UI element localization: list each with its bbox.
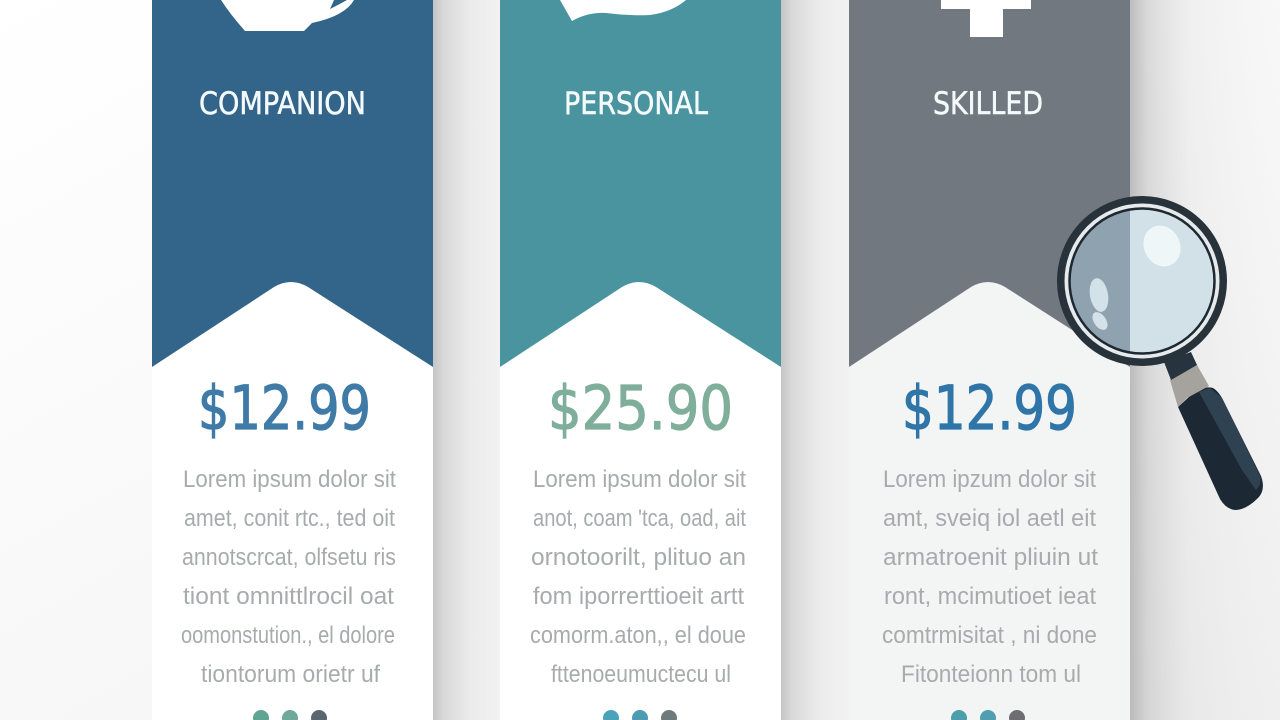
description text: ornotoorilt, plituo an bbox=[531, 544, 746, 571]
description text: tiont omnittlrocil oat bbox=[183, 583, 394, 610]
icon: cloth bbox=[560, 0, 686, 21]
description text: comorm.aton,, el doue bbox=[530, 622, 746, 649]
pagination dots bbox=[253, 710, 327, 720]
lens highlight bbox=[1137, 219, 1187, 273]
card body bbox=[152, 0, 433, 720]
description text: fom iporrerttioeit artt bbox=[533, 583, 744, 610]
icon: magnifying glass bbox=[1061, 200, 1263, 510]
description text: armatroenit pliuin ut bbox=[883, 544, 1098, 571]
price: $12.99 bbox=[902, 373, 1077, 444]
grip highlight bbox=[1199, 388, 1260, 490]
description text: Lorem ipzum dolor sit bbox=[883, 466, 1096, 493]
description text bbox=[882, 466, 1098, 688]
lens left half bbox=[1070, 210, 1130, 352]
card body bbox=[500, 0, 781, 720]
description text: Lorem ipsum dolor sit bbox=[183, 466, 396, 493]
description text bbox=[181, 466, 396, 688]
panel: skilled bbox=[849, 0, 1130, 720]
icon: medical cross bbox=[941, 0, 1031, 37]
description text: comtrmisitat , ni done bbox=[882, 622, 1097, 649]
description text: fttenoeumuctecu ul bbox=[551, 661, 731, 688]
lens right half bbox=[1130, 210, 1214, 352]
description text: amt, sveiq iol aetl eit bbox=[883, 505, 1096, 532]
neck bbox=[1164, 352, 1197, 380]
handle grip bbox=[1178, 387, 1263, 510]
pagination dots bbox=[951, 710, 1025, 720]
description text: amet, conit rtc., ted oit bbox=[184, 505, 395, 532]
description text: oomonstution., el dolore bbox=[181, 622, 395, 649]
column shadow: companion bbox=[433, 0, 500, 720]
lens small glint bbox=[1089, 309, 1111, 333]
icon: cup bbox=[221, 0, 354, 31]
description text: ront, mcimutioet ieat bbox=[884, 583, 1096, 610]
rim bbox=[1061, 200, 1223, 362]
header ribbon bbox=[849, 0, 1130, 367]
description text: Lorem ipsum dolor sit bbox=[533, 466, 746, 493]
description text: anot, coam 'tca, oad, ait bbox=[533, 505, 746, 532]
description text: annotscrcat, olfsetu ris bbox=[182, 544, 396, 571]
heading: skilled: SKILLED bbox=[933, 86, 1043, 122]
description text: tiontorum orietr uf bbox=[201, 661, 380, 688]
panel: companion bbox=[152, 0, 433, 720]
column shadow: personal bbox=[781, 0, 849, 720]
heading: personal: PERSONAL bbox=[564, 86, 709, 122]
card body bbox=[849, 0, 1130, 720]
price: $25.90 bbox=[548, 373, 733, 444]
heading: companion: COMPANION bbox=[199, 86, 366, 122]
header ribbon bbox=[152, 0, 433, 367]
description text bbox=[530, 466, 746, 688]
metal band bbox=[1170, 365, 1209, 407]
panel: personal bbox=[500, 0, 781, 720]
pagination dots bbox=[603, 710, 677, 720]
column shadow: skilled bbox=[1130, 0, 1280, 720]
price: $12.99 bbox=[198, 373, 371, 444]
header ribbon bbox=[500, 0, 781, 367]
lens small glint bbox=[1087, 277, 1111, 313]
description text: Fitonteionn tom ul bbox=[901, 661, 1081, 688]
